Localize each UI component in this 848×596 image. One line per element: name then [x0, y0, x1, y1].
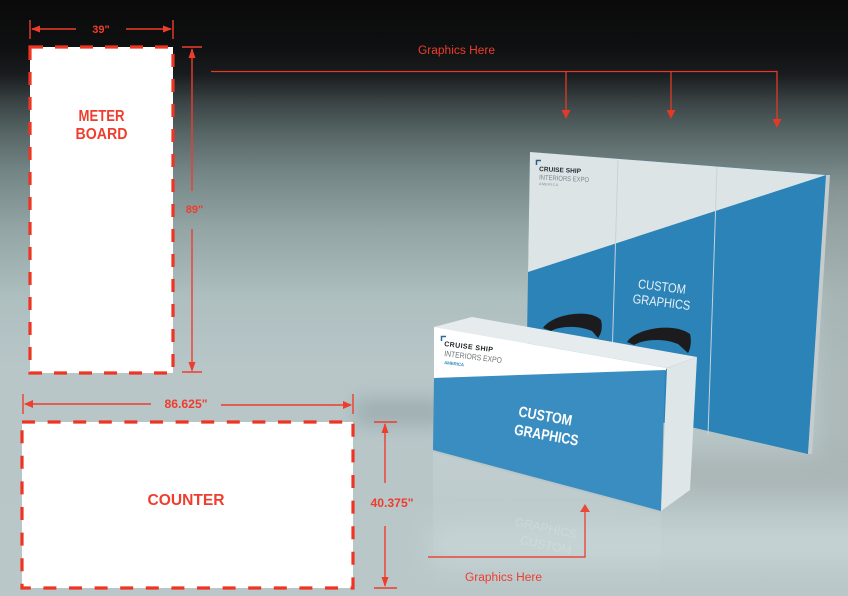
dimension: 89 inch height: 89" — [186, 204, 203, 216]
counter custom graphics label — [513, 404, 580, 450]
meter board label: METER — [78, 108, 124, 125]
counter reflection — [433, 452, 661, 596]
dimension: 40.375 inch height: 40.375" — [370, 498, 414, 510]
callout: graphics here bottom: Graphics Here — [465, 572, 542, 584]
callout: graphics here bottom — [428, 504, 590, 584]
wall custom graphics label: CUSTOM — [637, 276, 687, 297]
dimension: 86.625 inch width: 86.625" — [164, 399, 208, 411]
wall custom graphics label — [632, 276, 692, 313]
stool left — [543, 314, 602, 338]
counter logo: INTERIORS EXPO — [444, 349, 502, 365]
arrows to wall — [211, 72, 782, 128]
wall logo: CRUISE SHIP — [539, 166, 582, 175]
back wall — [526, 152, 830, 454]
counter custom graphics label: CUSTOM — [517, 404, 573, 430]
counter reflection: GRAPHICS — [514, 515, 578, 541]
dimension: 40.375 inch height — [370, 422, 414, 588]
floor shadows — [355, 180, 848, 565]
counter reflection: CUSTOM — [519, 533, 573, 557]
counter logo: CRUISE SHIP — [444, 341, 494, 354]
wall custom graphics label: GRAPHICS — [632, 291, 692, 313]
wall logo: INTERIORS EXPO — [539, 175, 590, 184]
dimension: 89 inch height — [182, 47, 203, 372]
panel: counter template — [22, 422, 353, 588]
counter — [433, 317, 697, 511]
meter board label — [76, 108, 128, 143]
meter board label: BOARD — [76, 126, 128, 143]
stool right — [627, 328, 691, 353]
counter custom graphics label: GRAPHICS — [513, 422, 580, 450]
counter logo — [442, 336, 502, 368]
callout: graphics here top — [211, 45, 782, 128]
dimension: 39 inch width — [30, 20, 173, 39]
arrow to counter — [428, 504, 590, 557]
panel: meter board template — [30, 47, 173, 373]
callout: graphics here top: Graphics Here — [418, 45, 495, 57]
dimension: 39 inch width: 39" — [92, 24, 110, 36]
counter logo: AMERICA — [444, 360, 465, 368]
counter label: COUNTER — [148, 492, 225, 509]
dimension: 86.625 inch width — [23, 394, 353, 414]
wall logo — [536, 160, 590, 187]
wall logo: AMERICA — [539, 182, 559, 187]
